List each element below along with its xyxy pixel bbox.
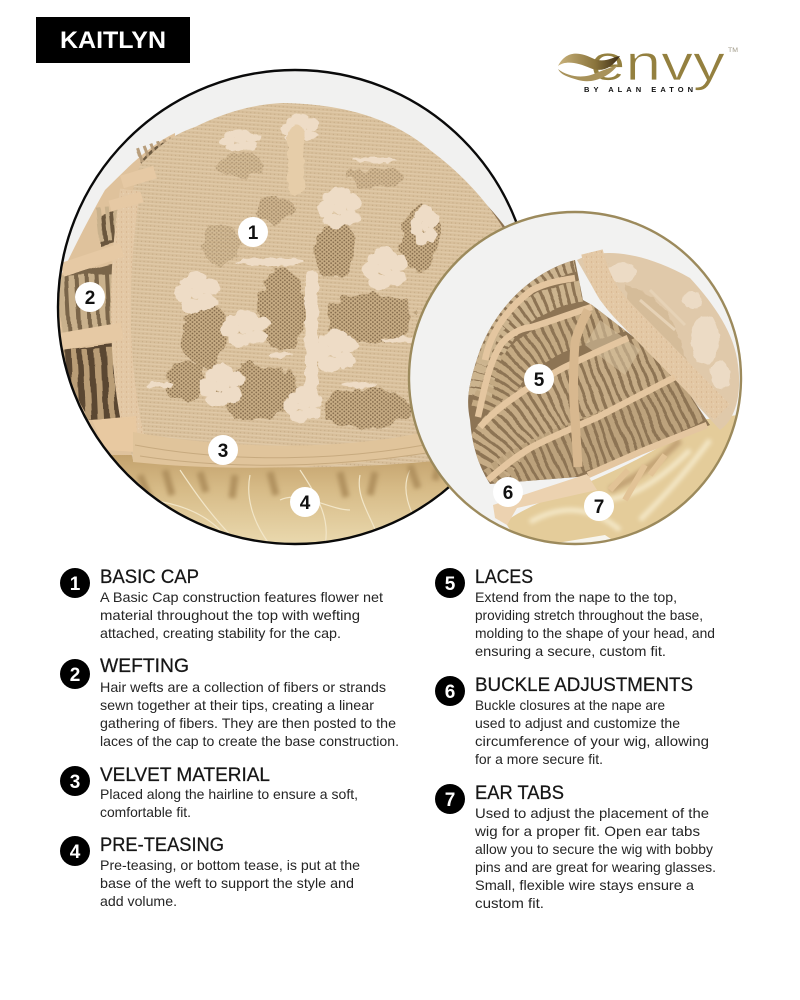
logo: envy by Alan Eaton: TM bbox=[728, 47, 738, 54]
item 6: buckle adjustments: for a more secure fit. bbox=[475, 752, 603, 767]
item 3: velvet material: VELVET MATERIAL bbox=[100, 765, 270, 786]
photo marker 1 bbox=[238, 217, 268, 247]
lace flowers bbox=[146, 113, 439, 423]
photo marker 3: 3 bbox=[218, 441, 228, 462]
item 6: buckle adjustments: circumference of your wig, allowing bbox=[475, 734, 709, 749]
item 7: ear tabs: pins and are great for wearing glasses. bbox=[475, 860, 716, 875]
item 2: wefting: laces of the cap to create the base construction. bbox=[100, 734, 399, 749]
buckle tab bbox=[493, 474, 597, 525]
ear tab strips bbox=[610, 455, 665, 500]
item 2: wefting: Hair wefts are a collection of fibers or strands bbox=[100, 680, 386, 695]
wefting hair on left side of the cap bbox=[50, 133, 530, 480]
item 7: ear tabs: EAR TABS bbox=[475, 783, 564, 804]
logo: envy by Alan Eaton: envy bbox=[590, 35, 725, 91]
item 4: pre-teasing: Pre-teasing, or bottom tease, is put at the bbox=[100, 858, 360, 873]
title badge: KAITLYN bbox=[36, 17, 190, 63]
item 6: buckle adjustments: 6 bbox=[445, 682, 455, 703]
logo: envy by Alan Eaton: BY ALAN EATON bbox=[584, 85, 693, 94]
title badge: KAITLYN: KAITLYN bbox=[60, 27, 166, 54]
photo marker 7: 7 bbox=[594, 497, 604, 518]
item 2: wefting: sewn together at their tips, creating a linear bbox=[100, 698, 374, 713]
pre-teasing hair along the bottom bbox=[112, 455, 448, 543]
large photo circle: basic cap, front view bbox=[50, 69, 540, 550]
photo marker 2 bbox=[75, 282, 105, 312]
item 7: ear tabs: Used to adjust the placement of the bbox=[475, 806, 709, 821]
logo: envy by Alan Eaton bbox=[558, 35, 738, 94]
item 5: laces: LACES bbox=[475, 567, 533, 588]
photo marker 6: 6 bbox=[503, 483, 513, 504]
item 5: laces: Extend from the nape to the top, bbox=[475, 590, 677, 605]
item 2: wefting: gathering of fibers. They are then posted to the bbox=[100, 716, 396, 731]
item 3: velvet material: Placed along the hairline to ensure a soft, bbox=[100, 787, 358, 802]
item 5: laces: ensuring a secure, custom fit. bbox=[475, 644, 666, 659]
item 5: laces: molding to the shape of your head, and bbox=[475, 626, 715, 641]
item 4: pre-teasing: 4 bbox=[70, 842, 81, 863]
item 1: basic cap: A Basic Cap construction features flower net bbox=[100, 590, 383, 605]
item 5: laces: 5 bbox=[445, 574, 456, 595]
small photo circle: side view of cap bbox=[409, 212, 741, 545]
item 3: velvet material: comfortable fit. bbox=[100, 805, 191, 820]
item 2: wefting bbox=[60, 656, 399, 749]
item 2: wefting: 2 bbox=[70, 665, 80, 686]
item 7: ear tabs: allow you to secure the wig with bobby bbox=[475, 842, 713, 857]
photo marker 5 bbox=[524, 364, 554, 394]
item 4: pre-teasing bbox=[60, 835, 360, 909]
item 7: ear tabs: custom fit. bbox=[475, 896, 544, 911]
item 1: basic cap: 1 bbox=[70, 574, 81, 595]
item 1: basic cap: BASIC CAP bbox=[100, 567, 199, 588]
item 3: velvet material: 3 bbox=[70, 772, 80, 793]
laces bbox=[478, 278, 707, 480]
wide seam bbox=[592, 252, 722, 412]
item 7: ear tabs bbox=[435, 783, 716, 911]
item 4: pre-teasing: add volume. bbox=[100, 894, 177, 909]
item 7: ear tabs: wig for a proper fit. Open ear tabs bbox=[474, 824, 700, 839]
item 1: basic cap: attached, creating stability for the cap. bbox=[100, 626, 341, 641]
photo marker 4 bbox=[290, 487, 320, 517]
blonde hair at the nape bbox=[505, 415, 738, 545]
photo marker 4: 4 bbox=[300, 493, 311, 514]
item 5: laces bbox=[435, 567, 715, 659]
wefting ridges bbox=[468, 260, 710, 484]
photo marker 7 bbox=[584, 491, 614, 521]
item 6: buckle adjustments: BUCKLE ADJUSTMENTS bbox=[475, 675, 693, 696]
item 6: buckle adjustments bbox=[435, 675, 709, 767]
photo marker 2: 2 bbox=[85, 288, 95, 309]
item 6: buckle adjustments: used to adjust and customize the bbox=[475, 716, 680, 731]
item 4: pre-teasing: PRE-TEASING bbox=[100, 835, 224, 856]
item 2: wefting: WEFTING bbox=[100, 656, 189, 677]
lace top of the cap bbox=[577, 253, 739, 430]
flower net dome bbox=[131, 103, 502, 468]
photo marker 1: 1 bbox=[248, 223, 259, 244]
item 6: buckle adjustments: Buckle closures at the nape are bbox=[475, 698, 665, 713]
item 1: basic cap bbox=[60, 567, 383, 641]
cap edge seam on the left bbox=[121, 190, 135, 440]
photo marker 5: 5 bbox=[534, 370, 545, 391]
dark net patches bbox=[166, 152, 442, 430]
photo marker 3 bbox=[208, 435, 238, 465]
bottom corner tab bbox=[92, 416, 138, 452]
item 4: pre-teasing: base of the weft to support the style and bbox=[100, 876, 354, 891]
item 3: velvet material bbox=[60, 765, 358, 820]
item 7: ear tabs: 7 bbox=[445, 790, 455, 811]
velvet material band bbox=[133, 432, 450, 468]
laces crossing the wefting bbox=[58, 172, 155, 342]
photo marker 6 bbox=[493, 477, 523, 507]
item 7: ear tabs: Small, flexible wire stays ensure a bbox=[475, 878, 694, 893]
item 1: basic cap: material throughout the top with wefting bbox=[100, 608, 360, 623]
item 5: laces: providing stretch throughout the base, bbox=[475, 608, 703, 623]
